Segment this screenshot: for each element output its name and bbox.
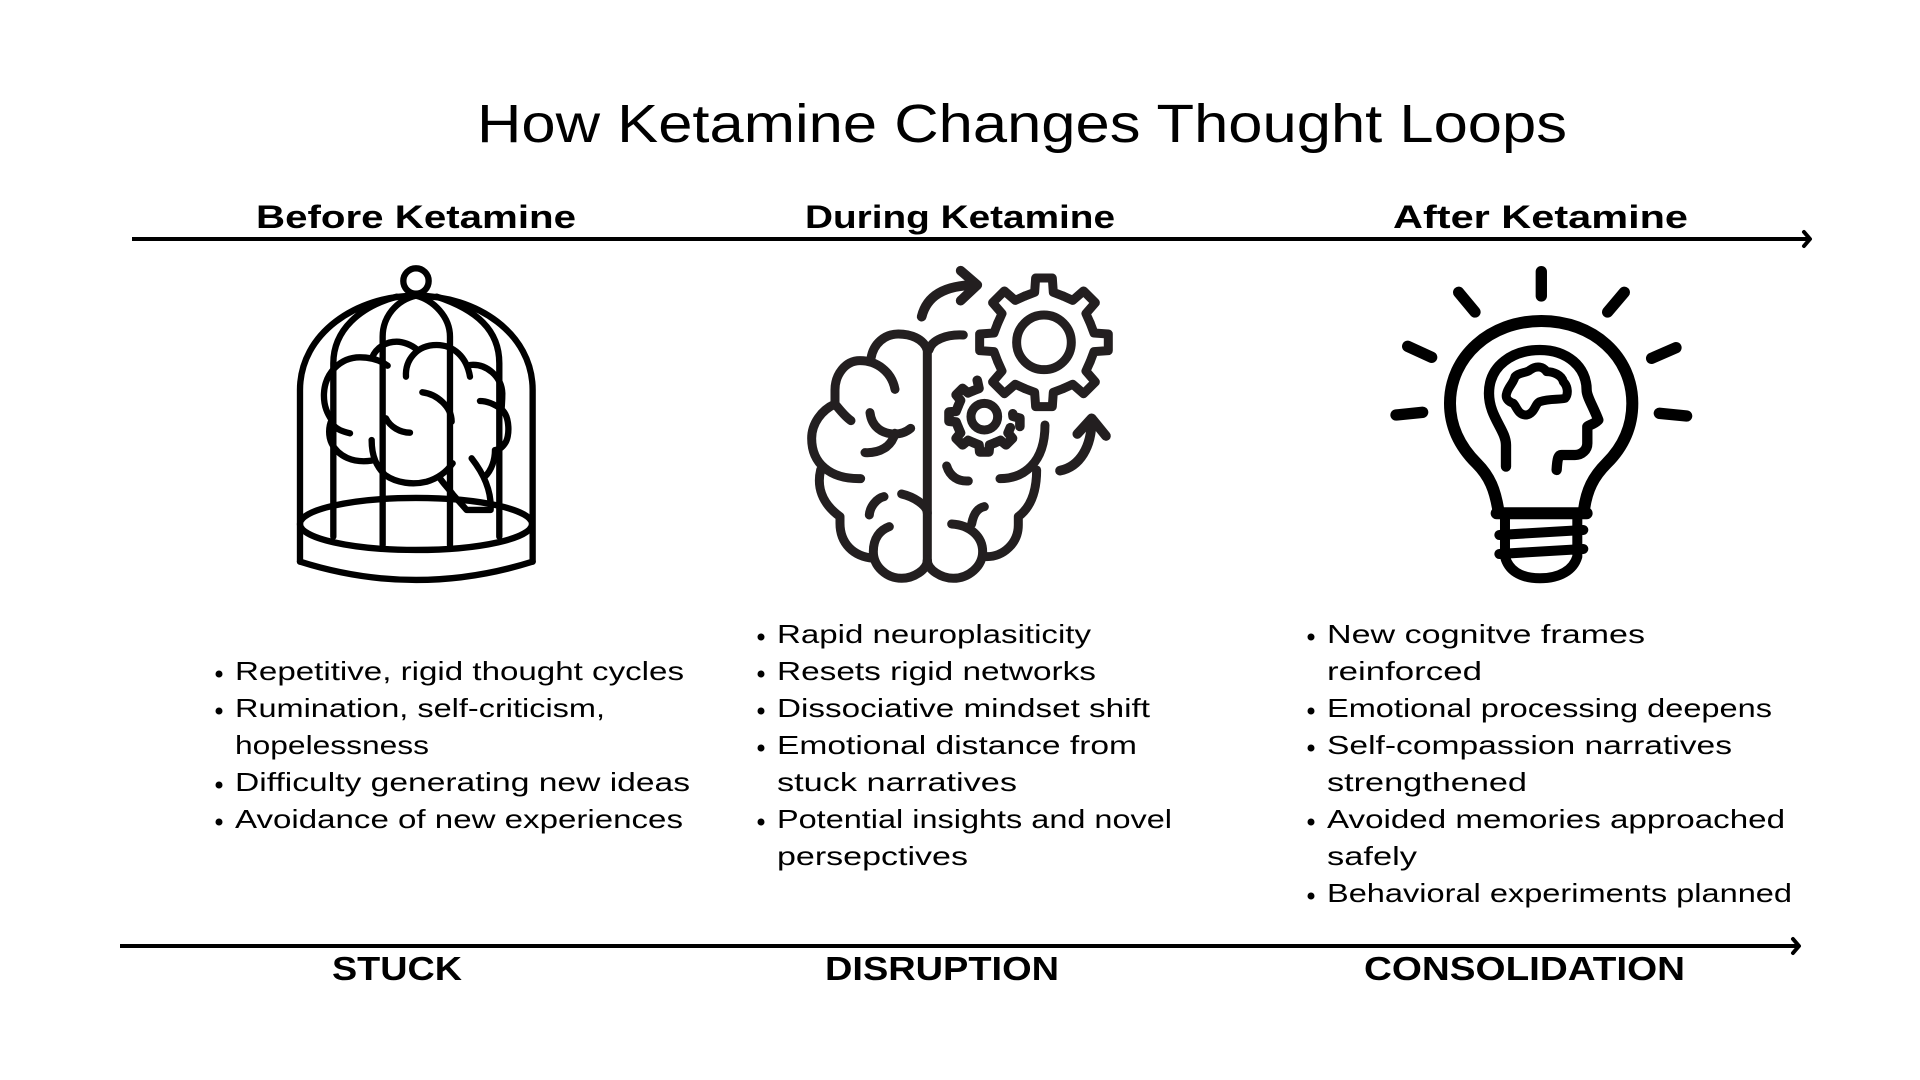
list: after ketamine: Self-compassion narratives — [1327, 730, 1732, 760]
list: after ketamine: New cognitve frames — [1327, 619, 1645, 649]
list: after ketamine — [1308, 619, 1792, 908]
list: during ketamine — [758, 619, 1172, 871]
heading: before ketamine: Before Ketamine — [256, 199, 576, 235]
list: after ketamine: Avoided memories approached — [1327, 804, 1785, 834]
list: during ketamine: Potential insights and novel — [777, 804, 1172, 834]
list: during ketamine: Dissociative mindset shift — [777, 693, 1151, 723]
list: during ketamine: Resets rigid networks — [777, 656, 1096, 686]
label: consolidation: CONSOLIDATION — [1364, 950, 1685, 987]
list: after ketamine: safely — [1327, 841, 1417, 871]
list: after ketamine: Behavioral experiments planned — [1327, 878, 1792, 908]
label: stuck: STUCK — [332, 950, 462, 987]
list: before ketamine: Avoidance of new experiences — [235, 804, 683, 834]
heading: after ketamine: After Ketamine — [1393, 199, 1688, 235]
list: before ketamine: Rumination, self-criticism, — [235, 693, 605, 723]
list: after ketamine: Emotional processing deepens — [1327, 693, 1772, 723]
icon: brain in cage — [300, 268, 533, 580]
arrow: top timeline — [132, 232, 1820, 246]
list: during ketamine: Rapid neuroplasiticity — [777, 619, 1091, 649]
list: before ketamine: hopelessness — [235, 730, 429, 760]
list: before ketamine: Repetitive, rigid thought cycles — [235, 656, 684, 686]
list: before ketamine — [216, 656, 690, 834]
icon: light bulb with head — [1396, 272, 1687, 578]
list: before ketamine: Difficulty generating new ideas — [235, 767, 690, 797]
arrow: bottom timeline — [120, 939, 1799, 953]
list: after ketamine: reinforced — [1327, 656, 1482, 686]
heading: during ketamine: During Ketamine — [805, 199, 1115, 235]
list: after ketamine: strengthened — [1327, 767, 1527, 797]
list: during ketamine: Emotional distance from — [777, 730, 1137, 760]
list: during ketamine: stuck narratives — [777, 767, 1017, 797]
label: disruption: DISRUPTION — [825, 950, 1059, 987]
icon: brain with gears — [812, 271, 1108, 578]
list: during ketamine: persepctives — [777, 841, 968, 871]
title: How Ketamine Changes Thought Loops — [477, 94, 1567, 154]
